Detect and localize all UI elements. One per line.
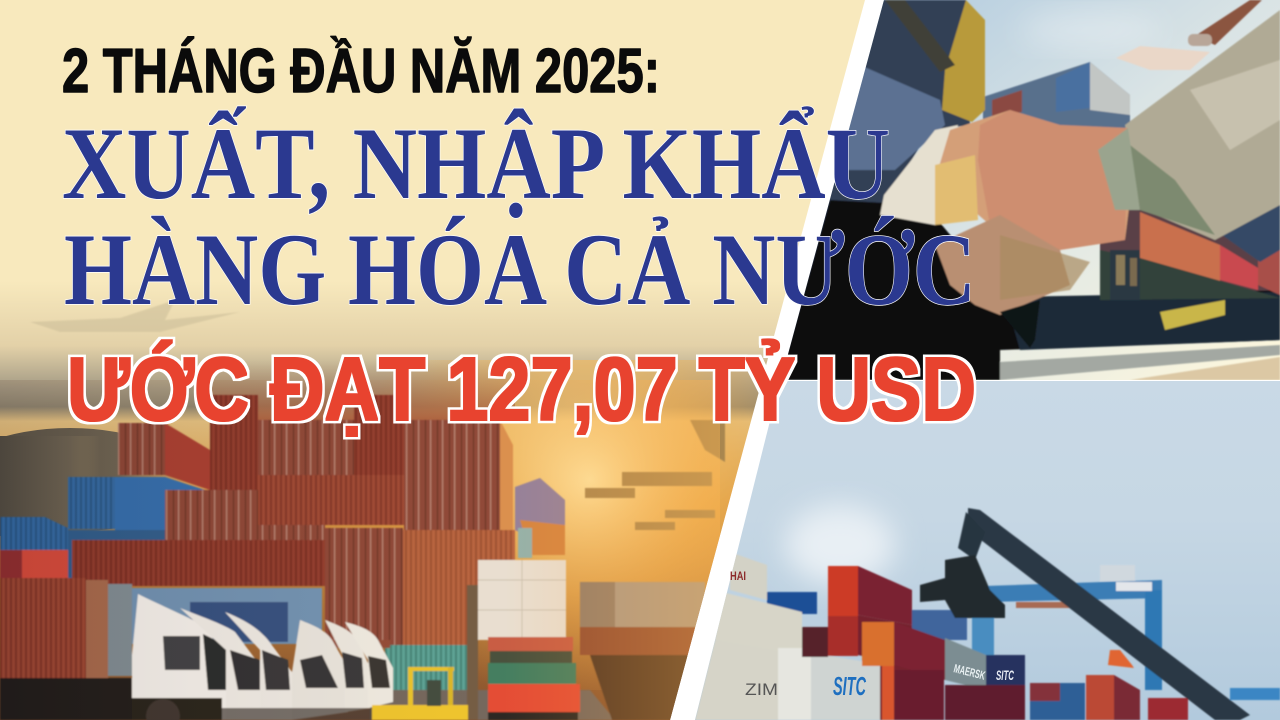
ship superstructure (1100, 250, 1280, 300)
yellow crane arm (942, 0, 985, 122)
clouds (1035, 13, 1138, 46)
left blue and red stack (0, 517, 68, 550)
distant containers (1030, 683, 1085, 720)
blue container behind trucks (132, 588, 322, 644)
containers behind the sleeve (1099, 208, 1270, 292)
aeroplane (1116, 46, 1210, 70)
upper hand (938, 110, 1130, 250)
long maroon container (72, 540, 325, 586)
heading: hàng hóa cả nước: HÀNG HÓA CẢ NƯỚC (64, 213, 976, 327)
panel: container yard with reach stacker (690, 381, 1280, 720)
heading: date line: 2 THÁNG ĐẦU NĂM 2025: (62, 37, 660, 106)
black hull (780, 200, 1280, 380)
water (590, 655, 700, 720)
Maersk grey container (945, 638, 986, 690)
suit (780, 0, 970, 380)
crane silhouettes (585, 420, 725, 530)
ground (370, 690, 615, 720)
orange and red containers (1140, 212, 1220, 285)
shirt cuff (880, 125, 958, 225)
blue gantry crane (972, 565, 1280, 700)
pier (1000, 345, 1280, 380)
watch (1098, 128, 1140, 210)
big rust container (0, 578, 86, 678)
right sleeve (1125, 10, 1280, 240)
text: container brand labels: HAI (730, 569, 746, 583)
red stacked containers (828, 566, 858, 616)
text: container brand labels (730, 569, 1015, 701)
text: container brand labels: ZIM (745, 680, 778, 699)
blue and orange stack at right (514, 478, 566, 532)
gangway (1160, 300, 1225, 330)
orange cab (1108, 650, 1134, 668)
blue containers (68, 477, 115, 529)
white truck fleet (132, 594, 393, 720)
text: container brand labels: SITC (996, 667, 1015, 683)
white container (478, 560, 566, 640)
aeroplane silhouette (33, 302, 234, 332)
red container with side (164, 424, 211, 490)
reach stacker boom (968, 508, 1250, 720)
text: container brand labels: SITC (833, 671, 867, 701)
title (62, 37, 976, 440)
yellow forklift (372, 667, 468, 720)
text: container brand labels: MAERSK (952, 661, 987, 683)
red and green truck rear (488, 637, 573, 651)
container stack (210, 395, 258, 495)
navy container (986, 655, 1025, 698)
spreader head (920, 555, 1005, 618)
orange containers (403, 530, 515, 586)
red door containers (165, 490, 210, 542)
background blue containers (767, 592, 817, 614)
container stack on ship (983, 62, 1130, 130)
teal container (385, 645, 467, 691)
panel: port and trucks at sunset (0, 0, 880, 720)
warm light overlay (0, 380, 720, 720)
faded container tops behind the headline (212, 368, 515, 421)
right grey container (580, 582, 615, 627)
heading: total value: ƯỚC ĐẠT 127,07 TỶ USD (67, 339, 976, 440)
heading: xuất nhập khẩu: XUẤT, NHẬP KHẨU (62, 105, 890, 221)
panel: handshake over container ship (780, 0, 1280, 380)
lower hand (935, 215, 1070, 315)
white containers at left (730, 552, 767, 600)
